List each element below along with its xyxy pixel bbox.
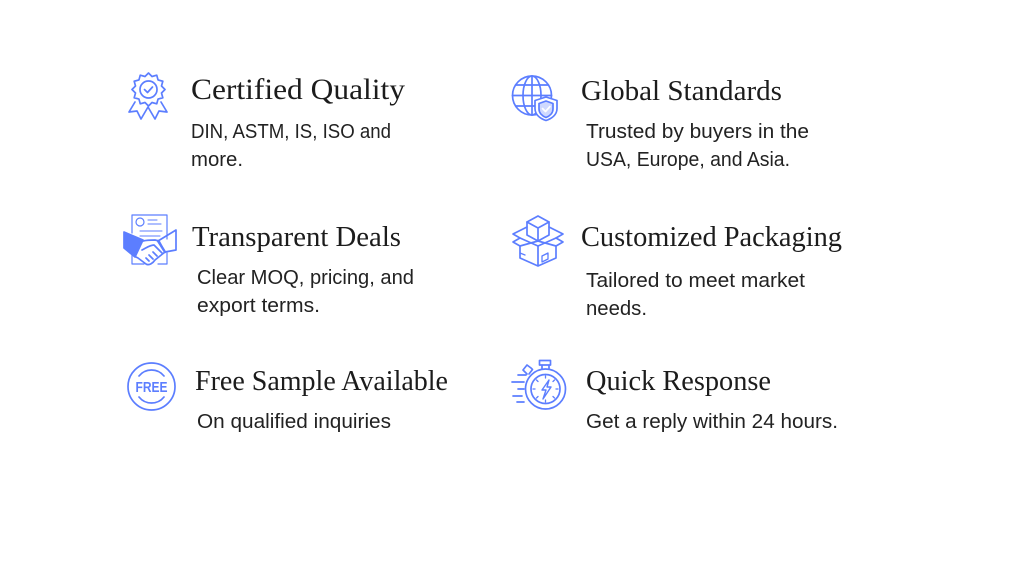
icon: award rosette xyxy=(129,73,167,119)
text: customized packaging description: needs. xyxy=(586,298,647,320)
icon: contract and handshake xyxy=(124,215,176,265)
text: global standards description: USA, Europe, and Asia. xyxy=(586,149,790,171)
text: global standards description: Trusted by buyers in the xyxy=(586,121,809,143)
text: transparent deals description: Clear MOQ, pricing, and xyxy=(197,267,414,289)
icon: stopwatch with lightning xyxy=(512,360,566,409)
text: transparent deals description xyxy=(197,267,414,317)
icon: open box xyxy=(513,216,563,266)
panel: quick response xyxy=(512,360,838,433)
text: free sample description: On qualified inquiries xyxy=(197,411,391,433)
heading: global standards: Global Standards xyxy=(581,75,782,107)
panel: customized packaging xyxy=(513,216,842,320)
text: customized packaging description: Tailored to meet market xyxy=(586,270,805,292)
heading: free sample available: Free Sample Available xyxy=(195,365,448,397)
text: global standards description xyxy=(586,121,809,171)
heading: quick response: Quick Response xyxy=(586,365,771,397)
panel: transparent deals xyxy=(124,215,414,317)
icon: globe with shield xyxy=(512,76,557,120)
heading: certified quality: Certified Quality xyxy=(191,73,405,106)
text: customized packaging description xyxy=(586,270,805,320)
heading: transparent deals: Transparent Deals xyxy=(192,221,401,253)
icon: free badge: FREE xyxy=(136,379,168,396)
text: certified quality description xyxy=(191,121,391,171)
text: certified quality description: more. xyxy=(191,149,243,171)
heading: customized packaging: Customized Packaging xyxy=(581,221,842,253)
text: transparent deals description: export terms. xyxy=(197,295,320,317)
icon: free badge xyxy=(128,363,175,410)
text: quick response description: Get a reply within 24 hours. xyxy=(586,411,838,433)
panel: free sample xyxy=(128,363,448,433)
text: certified quality description: DIN, ASTM, IS, ISO and xyxy=(191,121,391,143)
panel: global standards xyxy=(512,75,809,171)
panel: certified quality xyxy=(129,73,405,171)
